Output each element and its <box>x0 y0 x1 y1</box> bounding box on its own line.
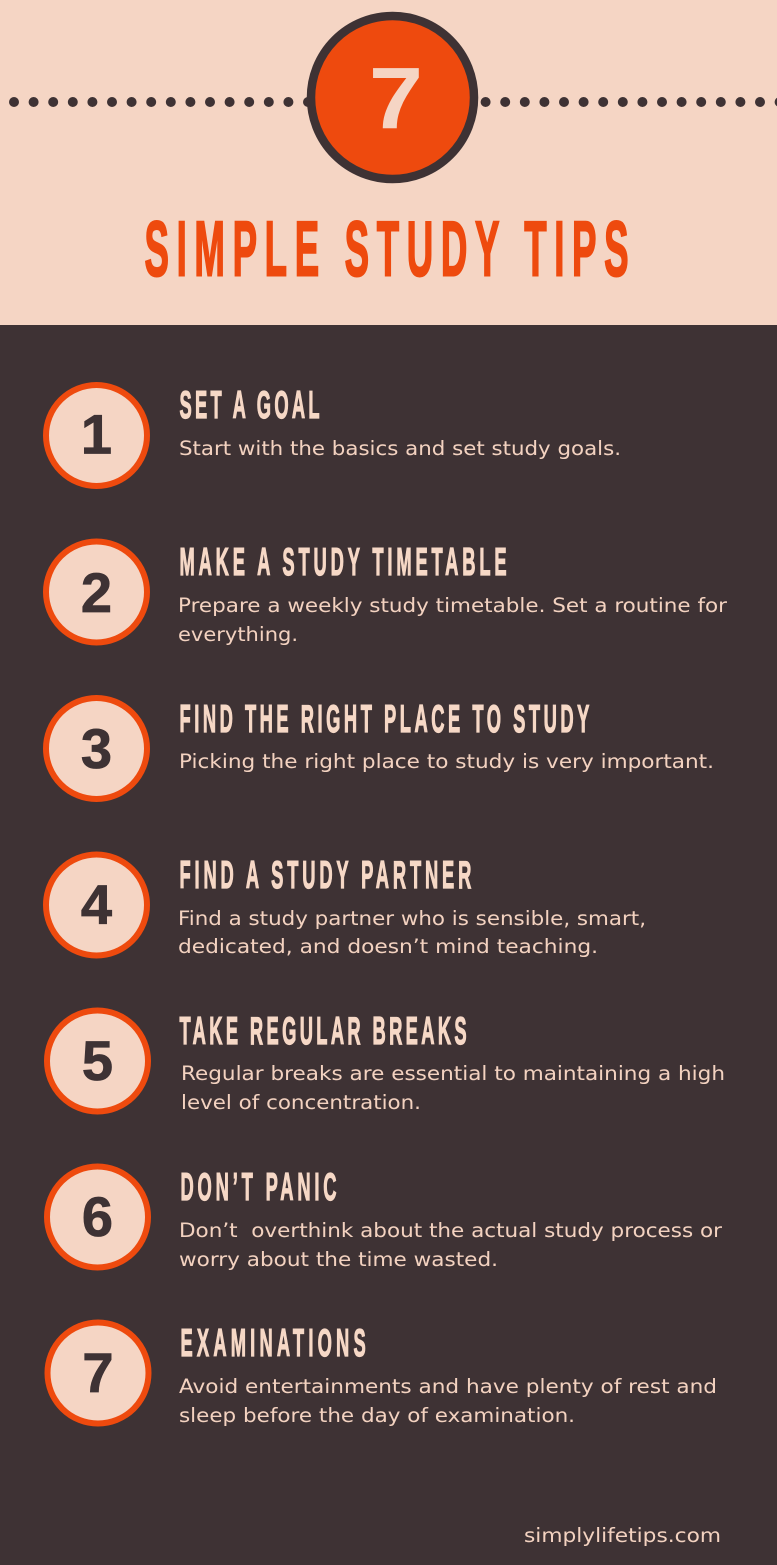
tip 1 <box>46 383 621 486</box>
text 1: Start with the basics and set study goals. <box>179 437 621 460</box>
text 5 <box>181 1062 725 1114</box>
text 7 <box>179 1375 717 1427</box>
heading 3: FIND THE RIGHT PLACE TO STUDY <box>180 697 589 741</box>
text 2: everything. <box>178 623 298 646</box>
text 5: Regular breaks are essential to maintaining a high <box>181 1062 725 1085</box>
number badge 5 <box>47 1010 148 1112</box>
text 4 <box>178 907 646 958</box>
tip 7 <box>48 1321 717 1427</box>
badge: big seven: 7 <box>369 49 423 147</box>
heading 4: FIND A STUDY PARTNER <box>180 853 471 897</box>
heading 2: MAKE A STUDY TIMETABLE <box>180 540 507 584</box>
panel: header <box>0 0 777 325</box>
text 7: sleep before the day of examination. <box>179 1404 575 1427</box>
text 3: Picking the right place to study is very important. <box>179 750 714 773</box>
number badge 5: 5 <box>82 1029 113 1092</box>
number badge 4: 4 <box>81 873 112 936</box>
footer source: simplylifetips.com <box>524 1524 721 1547</box>
badge: big seven <box>311 16 474 179</box>
heading 1: SET A GOAL <box>180 383 320 427</box>
text 2 <box>178 594 728 646</box>
number badge 4 <box>46 854 147 956</box>
number badge 3: 3 <box>81 717 112 780</box>
number badge 2: 2 <box>81 561 112 624</box>
heading 5: TAKE REGULAR BREAKS <box>180 1009 467 1053</box>
text 6: Don’t overthink about the actual study process or <box>179 1219 723 1242</box>
number badge 6 <box>47 1166 148 1268</box>
number badge 7: 7 <box>82 1341 114 1404</box>
number badge 3 <box>46 698 147 799</box>
tip 3 <box>46 697 714 799</box>
number badge 1 <box>46 385 147 486</box>
text 4: Find a study partner who is sensible, smart, <box>178 907 646 930</box>
text 4: dedicated, and doesn’t mind teaching. <box>178 935 598 958</box>
text 6 <box>179 1219 723 1271</box>
tip 4 <box>46 853 646 958</box>
text 5: level of concentration. <box>181 1091 421 1114</box>
heading 7: EXAMINATIONS <box>180 1321 366 1365</box>
number badge 2 <box>46 542 147 642</box>
title: SIMPLE STUDY TIPS <box>144 205 629 292</box>
heading 6: DON’T PANIC <box>180 1165 337 1209</box>
number badge 6: 6 <box>82 1185 113 1248</box>
panel: tips background <box>0 325 777 1565</box>
tip 5 <box>47 1009 725 1114</box>
number badge 1: 1 <box>81 402 112 466</box>
dotted line <box>9 97 777 107</box>
text 2: Prepare a weekly study timetable. Set a routine for <box>178 594 728 617</box>
text 6: worry about the time wasted. <box>179 1248 498 1271</box>
number badge 7 <box>48 1322 148 1424</box>
tip 6 <box>47 1165 723 1271</box>
text 7: Avoid entertainments and have plenty of rest and <box>179 1375 717 1398</box>
tip 2 <box>46 540 728 646</box>
